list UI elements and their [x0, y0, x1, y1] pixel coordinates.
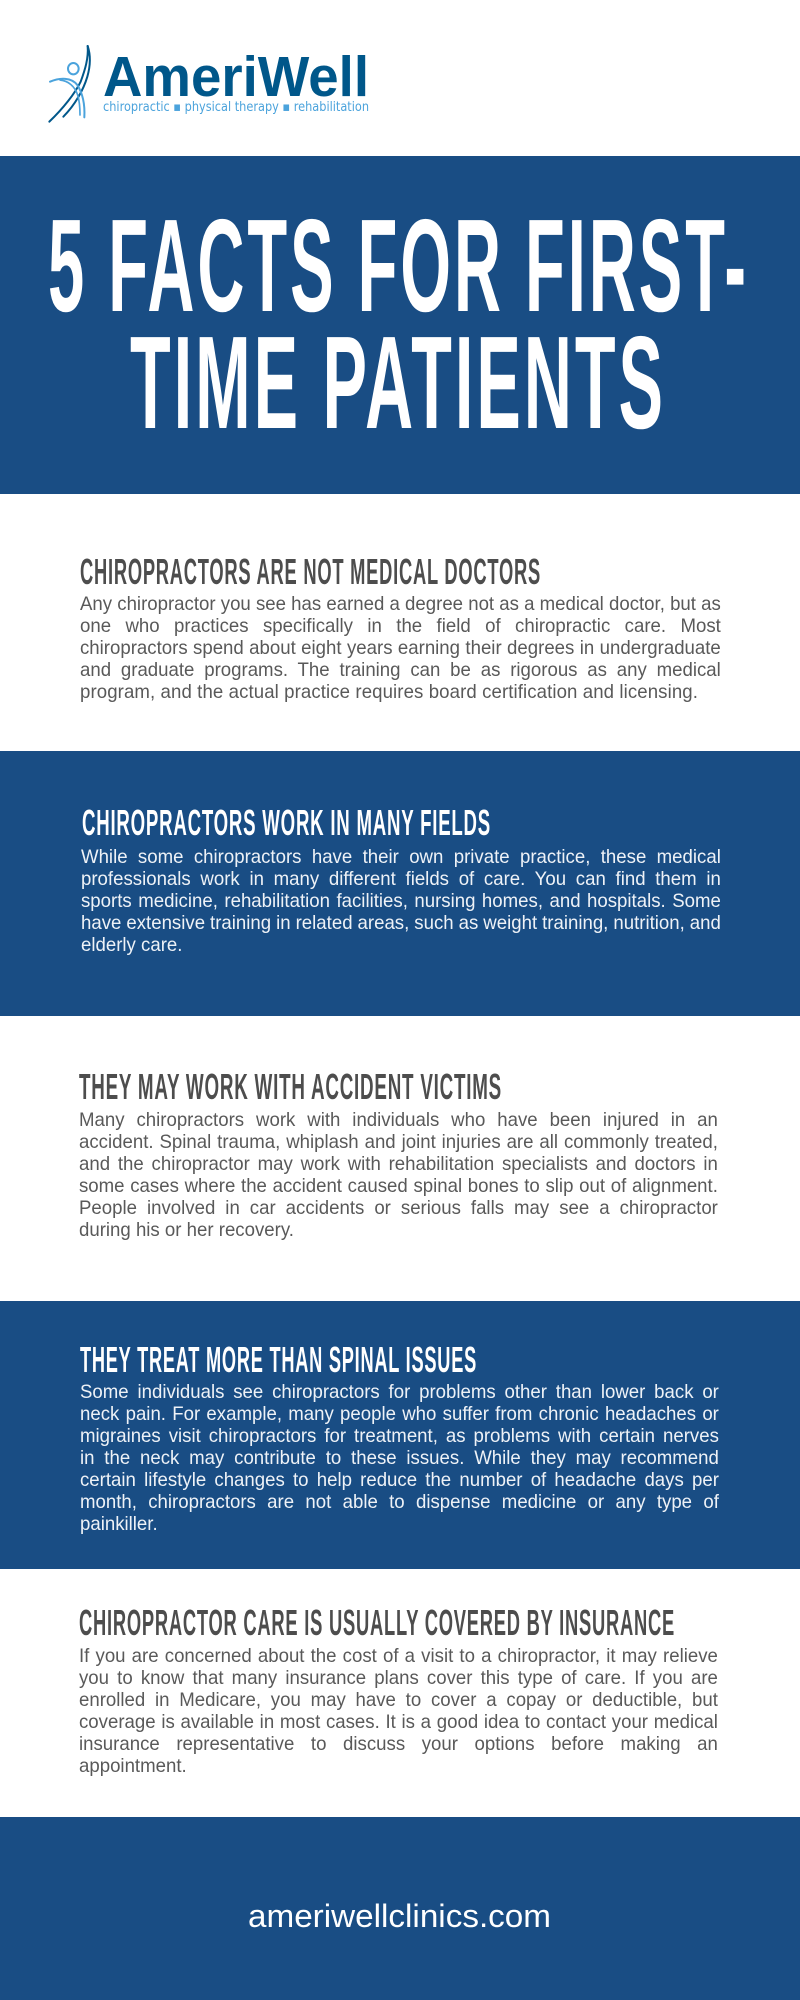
- body text: [79, 1109, 718, 1241]
- panel: accident victims: [79, 1066, 718, 1241]
- panel: not medical doctors: [80, 551, 721, 703]
- body text: coverage is available in most cases. It is a good idea to contact your medical: [79, 1711, 718, 1733]
- body text: [81, 846, 721, 956]
- logo wordmark: AmeriWell: [103, 45, 369, 109]
- panel: more than spinal issues: [0, 1301, 800, 1569]
- panel: many fields: [0, 751, 800, 1016]
- panel: insurance: [79, 1602, 718, 1777]
- body text: Any chiropractor you see has earned a degree not as a medical doctor, but as: [80, 593, 721, 615]
- body text: program, and the actual practice requires board certification and licensing.: [80, 681, 698, 703]
- icon: stretching figure: [49, 46, 90, 122]
- body text: [80, 593, 721, 703]
- footer: [0, 1817, 800, 2000]
- body text: month, chiropractors are not able to dispense medicine or any type of: [80, 1491, 719, 1513]
- body text: neck pain. For example, many people who suffer from chronic headaches or: [80, 1403, 719, 1425]
- body text: sports medicine, rehabilitation facilities, nursing homes, and hospitals. Some: [81, 890, 721, 912]
- body text: While some chiropractors have their own private practice, these medical: [81, 846, 721, 868]
- body text: migraines visit chiropractors for treatment, as problems with certain nerves: [80, 1425, 719, 1447]
- body text: and the chiropractor may work with rehabilitation specialists and doctors in: [79, 1153, 718, 1175]
- logo tagline: chiropractic ▪ physical therapy ▪ rehabilitation: [103, 100, 369, 115]
- body text: appointment.: [79, 1755, 187, 1777]
- body text: in the neck may contribute to these issues. While they may recommend: [80, 1447, 719, 1469]
- body text: accident. Spinal trauma, whiplash and joint injuries are all commonly treated,: [79, 1131, 718, 1153]
- body text: professionals work in many different fields of care. You can find them in: [81, 868, 721, 890]
- body text: People involved in car accidents or serious falls may see a chiropractor: [79, 1197, 718, 1219]
- body text: certain lifestyle changes to help reduce the number of headache days per: [80, 1469, 719, 1491]
- body text: during his or her recovery.: [79, 1219, 294, 1241]
- body text: Many chiropractors work with individuals who have been injured in an: [79, 1109, 718, 1131]
- body text: some cases where the accident caused spinal bones to slip out of alignment.: [79, 1175, 718, 1197]
- body text: chiropractors spend about eight years earning their degrees in undergraduate: [80, 637, 721, 659]
- title: [48, 192, 749, 456]
- body text: [80, 1381, 719, 1535]
- website: ameriwellclinics.com: [248, 1898, 551, 1934]
- body text: you to know that many insurance plans cover this type of care. If you are: [79, 1667, 718, 1689]
- body text: Some individuals see chiropractors for problems other than lower back or: [80, 1381, 719, 1403]
- body text: insurance representative to discuss your options before making an: [79, 1733, 718, 1755]
- body text: have extensive training in related areas, such as weight training, nutrition, and: [81, 912, 721, 934]
- body text: [79, 1645, 718, 1777]
- body text: and graduate programs. The training can be as rigorous as any medical: [80, 659, 721, 681]
- body text: If you are concerned about the cost of a visit to a chiropractor, it may relieve: [79, 1645, 718, 1667]
- logo: AmeriWell: [48, 45, 369, 123]
- body text: one who practices specifically in the field of chiropractic care. Most: [80, 615, 721, 637]
- title banner: [0, 156, 800, 494]
- body text: elderly care.: [81, 934, 182, 956]
- body text: enrolled in Medicare, you may have to cover a copay or deductible, but: [79, 1689, 718, 1711]
- body text: painkiller.: [80, 1513, 158, 1535]
